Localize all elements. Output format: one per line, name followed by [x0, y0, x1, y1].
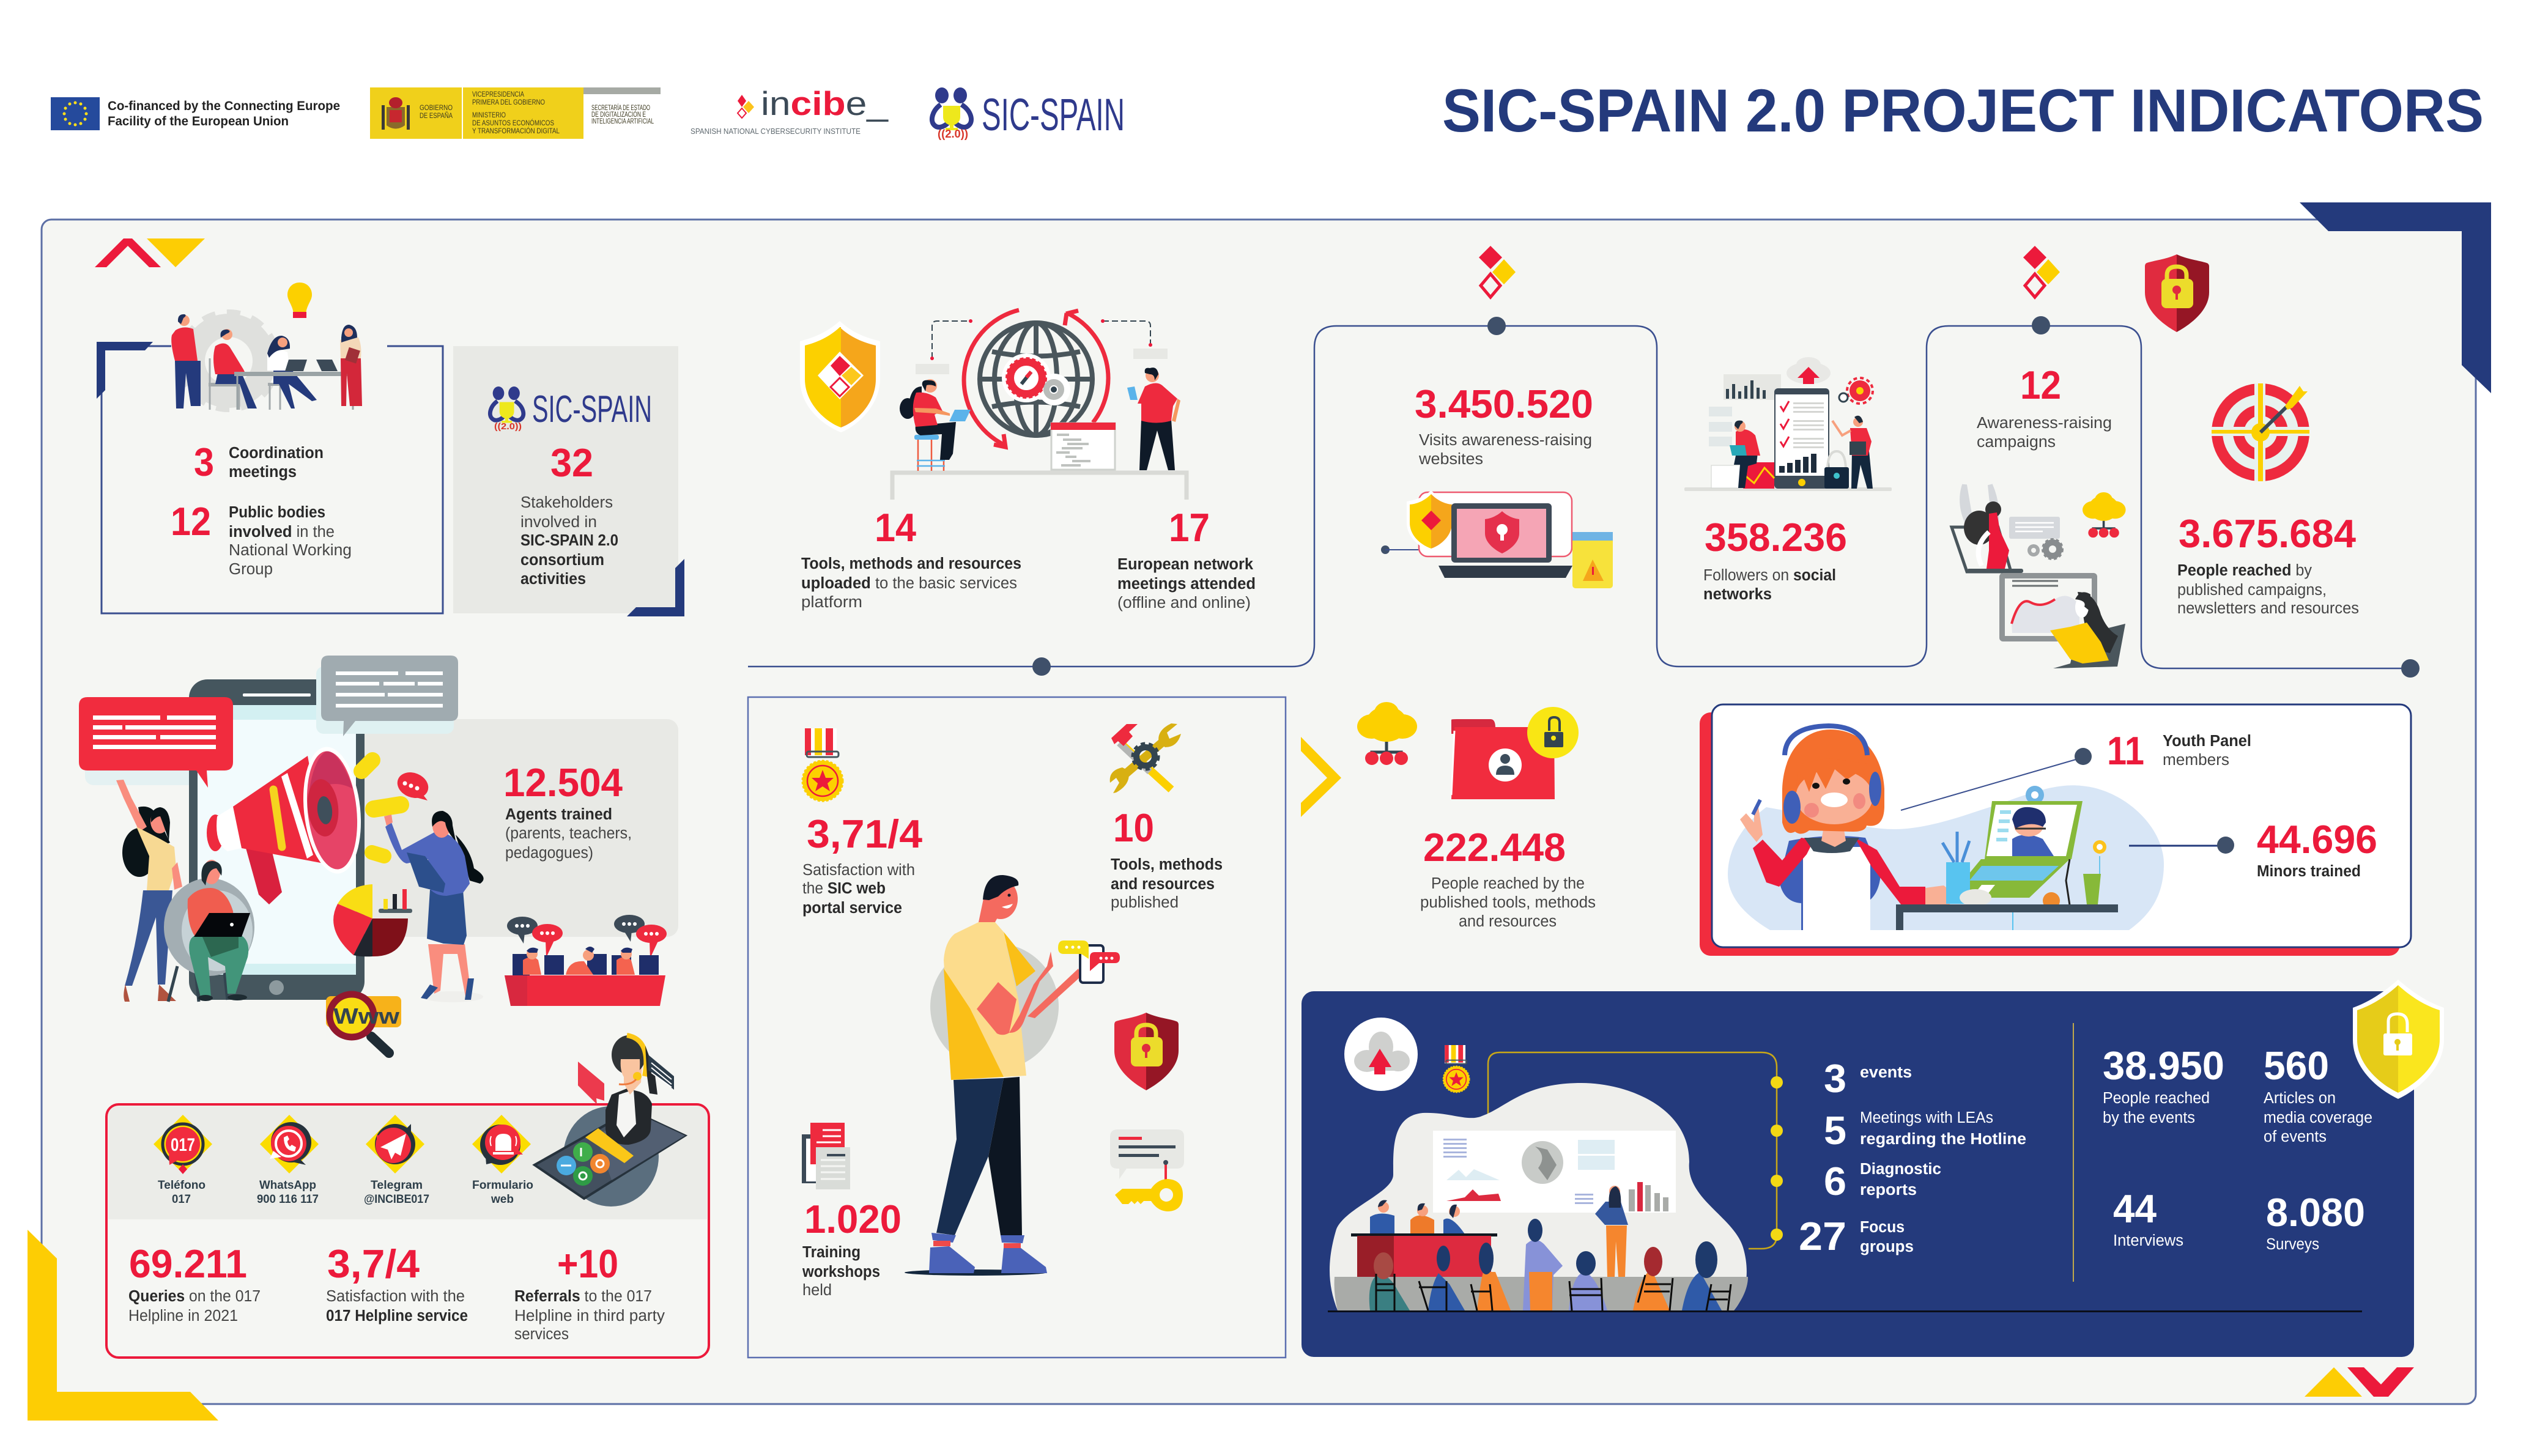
stat: referrals: Referrals to the 017: [514, 1288, 652, 1305]
stat: social followers: Followers on social: [1703, 567, 1836, 584]
stat: diagnostic reports: Diagnostic: [1860, 1161, 1941, 1178]
label: telephone: [158, 1179, 206, 1206]
stat: people reached by tools: 222.448: [1423, 825, 1566, 870]
logo: Connecting Europe Facility: Co-financed by the Connecting Europe: [108, 99, 340, 113]
divider: [2073, 1023, 2074, 1282]
stat: tools published: 10: [1113, 805, 1154, 850]
logo: Gobierno de España: PRIMERA DEL GOBIERNO: [472, 98, 545, 106]
stat: training workshops: held: [802, 1282, 832, 1299]
logo: SIC-SPAIN: [932, 87, 1125, 140]
stat: meetings with LEAs: 5: [1824, 1108, 1846, 1153]
panel: web portal and training: [748, 697, 1286, 1358]
stat: youth panel: [2107, 728, 2251, 773]
logo: SIC-SPAIN: SIC-SPAIN: [982, 89, 1125, 140]
figure: woman with tablet: [384, 811, 484, 1002]
icon: key and message: [1110, 1129, 1184, 1211]
stat: public bodies: National Working: [229, 542, 352, 559]
illustration: laptop with security shield: [1381, 490, 1613, 588]
icon: diamonds above card three: [2023, 246, 2060, 297]
stat: media articles: of events: [2264, 1128, 2327, 1145]
icon: telegram: [366, 1115, 424, 1173]
stat: tools uploaded: platform: [801, 594, 862, 611]
stat: referrals: Helpline in third party: [514, 1307, 665, 1325]
logo: INCIBE: SPANISH NATIONAL CYBERSECURITY INSTITUTE: [691, 127, 861, 136]
illustration: girl at laptop: [1728, 726, 2164, 930]
stat: portal satisfaction: portal service: [802, 900, 902, 917]
panel: 017 helpline: [106, 1035, 709, 1358]
stat: training workshops: 1.020: [804, 1197, 902, 1241]
stat: media articles: Articles on: [2264, 1090, 2336, 1107]
stat: tools published: published: [1111, 894, 1179, 911]
logo: SIC-SPAIN: ((2.0)): [938, 128, 968, 140]
stat: training workshops: [802, 1197, 902, 1299]
stat: tools uploaded: 14: [875, 505, 916, 550]
illustration: call centre desk: [505, 915, 667, 1006]
icon: code window: [1051, 423, 1116, 470]
icon: medal: [802, 728, 843, 801]
stat: awareness campaigns: [1977, 363, 2112, 451]
icon: megaphone: [207, 744, 401, 904]
label: telegram: @INCIBE017: [364, 1193, 429, 1206]
figure: man with tablet: [1127, 368, 1180, 470]
label: whatsapp: [257, 1179, 319, 1206]
stat: coordination meetings: 3: [194, 440, 214, 484]
stat: training workshops: Training: [802, 1244, 861, 1261]
icon: cloud upload: [1344, 1018, 1418, 1091]
logo: Connecting Europe Facility: Facility of the European Union: [108, 114, 289, 128]
stat: youth panel: 11: [2107, 728, 2144, 773]
stat: website visits: 3.450.520: [1415, 382, 1593, 426]
stat: social followers: [1703, 515, 1847, 603]
logo: Gobierno de España: INTELIGENCIA ARTIFICIAL: [591, 117, 654, 125]
stat: social followers: 358.236: [1705, 515, 1847, 560]
stat: diagnostic reports: reports: [1860, 1181, 1917, 1199]
illustration: social media phone: [1684, 357, 1892, 491]
label: telephone: 017: [172, 1193, 191, 1206]
logo: Gobierno de España: DE ASUNTOS ECONÓMICOS: [472, 118, 554, 127]
stat: helpline satisfaction: 017 Helpline service: [326, 1307, 468, 1325]
icon: www magnifier: [326, 994, 401, 1053]
stat: awareness campaigns: 12: [2020, 363, 2061, 407]
stat: focus groups: groups: [1860, 1238, 1914, 1255]
stat: portal satisfaction: 3,71/4: [807, 811, 922, 856]
desk objects: [1896, 832, 2118, 930]
text: stakeholders description: [520, 494, 618, 588]
stat: public bodies: 12: [171, 499, 211, 544]
stat: agents trained: [503, 760, 632, 862]
stat: queries: Helpline in 2021: [128, 1307, 238, 1325]
logo: INCIBE: [691, 84, 889, 136]
stat: queries: 69.211: [129, 1241, 247, 1286]
logo: Gobierno de España: SECRETARÍA DE ESTADO: [591, 103, 650, 112]
logo: SIC-SPAIN small: SIC-SPAIN: [532, 388, 652, 431]
logo: Gobierno de España: DE DIGITALIZACIÓN E: [591, 109, 646, 119]
icon: medal small: [1443, 1045, 1470, 1092]
timeline dots: [1771, 1076, 1783, 1241]
stat: tools published: and resources: [1111, 876, 1215, 893]
figure: man with phone: [905, 875, 1120, 1276]
icon: www magnifier: Www: [333, 1003, 400, 1029]
chart: pie and bars: [333, 884, 412, 956]
laptop with video call: [1949, 786, 2083, 905]
stat: agents trained: 12.504: [503, 760, 623, 805]
panel: agents trained: [79, 656, 2444, 1358]
illustration: phone with megaphone: [79, 656, 484, 1053]
stat: youth panel: members: [2163, 752, 2229, 769]
stat: meetings with LEAs: [1824, 1108, 2026, 1153]
stat: public bodies: involved in the: [229, 523, 335, 541]
stat: training workshops: workshops: [802, 1263, 880, 1280]
stat: helpline satisfaction: [326, 1241, 468, 1325]
panel: coordination: [97, 283, 443, 613]
stat: people reached by campaigns: 3.675.684: [2179, 511, 2356, 556]
stat: network meetings: (offline and online): [1117, 594, 1251, 612]
stat: social followers: networks: [1703, 586, 1772, 603]
stat: people reached by tools: People reached by the: [1431, 875, 1585, 892]
stat: coordination meetings: Coordination: [229, 445, 324, 462]
stat: people reached by campaigns: People reached by: [2177, 562, 2312, 579]
logo: Connecting Europe Facility: [51, 97, 340, 130]
stat: queries: Queries on the 017: [128, 1288, 261, 1305]
decoration: red and yellow arrows bottom right: [2305, 1367, 2414, 1397]
stat: surveys: 8.080: [2266, 1190, 2365, 1235]
icon: phone 017: [154, 1115, 212, 1174]
stat: portal satisfaction: the SIC web: [802, 880, 886, 897]
stat: awareness campaigns: Awareness-raising: [1977, 415, 2112, 432]
stat: interviews: 44: [2113, 1186, 2157, 1231]
stat: youth panel: Youth Panel: [2163, 733, 2251, 750]
presenter woman: [1595, 1186, 1628, 1277]
stat: focus groups: Focus: [1860, 1219, 1905, 1236]
arrow: yellow chevron: [1301, 737, 1341, 817]
stat: network meetings: meetings attended: [1117, 575, 1256, 593]
text: stakeholders description: activities: [520, 571, 586, 588]
panel: stakeholders: 32: [550, 440, 593, 485]
baseline: [1328, 1310, 2362, 1312]
icon: diamonds above card one: [1479, 246, 1516, 297]
illustration: conference room: [1330, 1083, 1748, 1310]
stat: focus groups: [1799, 1214, 1914, 1258]
stat: surveys: Surveys: [2266, 1236, 2319, 1253]
stat: tools uploaded: [801, 505, 1021, 611]
icon: web form alarm: [472, 1115, 531, 1173]
text: stakeholders description: consortium: [520, 552, 604, 569]
panel: stakeholders: [453, 346, 684, 616]
panel: events: [1302, 980, 2444, 1357]
icon: yellow shield with diamonds: [800, 321, 880, 432]
label: telegram: [364, 1179, 429, 1206]
stat: diagnostic reports: [1824, 1159, 1941, 1203]
corner bracket: bottom left: [28, 1230, 218, 1421]
stat: diagnostic reports: 6: [1824, 1159, 1846, 1203]
label: web form: Formulario: [472, 1179, 533, 1192]
label: web form: [472, 1179, 533, 1206]
connector dot: youth panel: [2075, 748, 2092, 765]
audience: [1369, 1219, 1731, 1310]
connector: minors trained: [2129, 837, 2234, 854]
logo: Gobierno de España: Y TRANSFORMACIÓN DIGITAL: [472, 126, 560, 135]
stat: network meetings: [1117, 505, 1256, 612]
girl: [1740, 726, 1957, 930]
stat: agents trained: pedagogues): [505, 844, 593, 862]
stat: tools uploaded: uploaded to the basic services: [801, 575, 1017, 592]
title: SIC-SPAIN 2.0 PROJECT INDICATORS: [1442, 76, 2484, 144]
logo: Gobierno de España: [370, 87, 661, 139]
stat: events: 3: [1824, 1056, 1846, 1101]
logo: SIC-SPAIN small: [490, 386, 652, 432]
illustration: helpline agent on phone: [535, 1035, 685, 1207]
stat: portal satisfaction: Satisfaction with: [802, 862, 915, 879]
stat: people reached by campaigns: newsletters and resources: [2177, 600, 2359, 617]
speech bubble: grey: [321, 656, 458, 736]
stat: helpline satisfaction: 3,7/4: [327, 1241, 420, 1286]
stat: agents trained: Agents trained: [505, 806, 612, 823]
stat: public bodies: [171, 499, 352, 578]
label: telegram: Telegram: [371, 1179, 423, 1192]
stat: network meetings: 17: [1169, 505, 1210, 550]
timeline dots: [1032, 316, 2420, 678]
stat: portal satisfaction: [802, 811, 922, 917]
stat: referrals: [514, 1241, 665, 1343]
main frame panel: [42, 220, 2476, 1404]
stat: public bodies: Group: [229, 561, 273, 578]
speech bubble: red: [79, 697, 233, 788]
icon: documents: [802, 1123, 850, 1189]
stat: public bodies: Public bodies: [229, 504, 325, 521]
icon: whatsapp: [260, 1115, 319, 1173]
stat: tools published: [1111, 805, 1223, 911]
icon: cycle arrows: [964, 310, 1108, 447]
platform: [892, 473, 1187, 500]
label: whatsapp: 900 116 117: [257, 1193, 319, 1206]
stat: website visits: websites: [1418, 451, 1483, 468]
illustration: globe and people: [892, 310, 1187, 500]
timeline connector: [1488, 1052, 1777, 1249]
text: stakeholders description: Stakeholders: [520, 494, 613, 511]
stat: queries: [128, 1241, 261, 1325]
icon: phone 017: 017: [171, 1135, 195, 1155]
stat: interviews: [2113, 1186, 2183, 1249]
logo: SIC-SPAIN small: ((2.0)): [494, 421, 522, 432]
stat: website visits: [1415, 382, 1593, 468]
stat: coordination meetings: meetings: [229, 464, 297, 481]
stat: referrals: +10: [557, 1241, 618, 1286]
stat: interviews: Interviews: [2113, 1232, 2183, 1249]
icon: hammer, wrench and gear: [1110, 723, 1181, 793]
stat: helpline satisfaction: Satisfaction with the: [326, 1288, 465, 1305]
stat: people reached by tools: and resources: [1459, 913, 1557, 930]
stat: meetings with LEAs: Meetings with LEAs: [1860, 1109, 1993, 1126]
icon: red lock shield: [1114, 1013, 1179, 1090]
icon: yellow open lock shield: [2353, 980, 2444, 1099]
corner bracket: top right: [2300, 202, 2491, 393]
stat: people reached by campaigns: [2177, 511, 2359, 617]
text: stakeholders description: SIC-SPAIN 2.0: [520, 532, 618, 549]
stat: tools uploaded: Tools, methods and resources: [801, 555, 1021, 572]
stat: focus groups: 27: [1799, 1214, 1846, 1258]
stat: minors trained: 44.696: [2257, 817, 2377, 862]
illustration: team at table: [171, 283, 362, 410]
icon: link gears: [1002, 353, 1070, 405]
icon: target with dart: [2212, 383, 2309, 481]
stat: people reached by events: by the events: [2103, 1109, 2195, 1126]
panel: youth panel card: [1700, 704, 2411, 956]
stat: people reached by tools: [1420, 825, 1596, 930]
logo: Gobierno de España: MINISTERIO: [472, 111, 506, 119]
stat: people reached by events: 38.950: [2103, 1043, 2224, 1088]
stat: network meetings: European network: [1117, 556, 1254, 573]
text: stakeholders description: involved in: [520, 514, 597, 531]
connector line around the top cards: [748, 326, 2410, 668]
stat: people reached by tools: published tools, methods: [1420, 894, 1596, 911]
stat: people reached by campaigns: published campaigns,: [2177, 582, 2327, 599]
stat: media articles: media coverage: [2264, 1109, 2372, 1126]
stat: people reached by events: People reached: [2103, 1090, 2210, 1107]
stat: events: [1824, 1056, 1912, 1101]
label: whatsapp: WhatsApp: [259, 1179, 316, 1192]
icon: small chat bubble: [393, 768, 432, 802]
stat: events: events: [1860, 1064, 1912, 1081]
icon: red lock shield top: [2145, 254, 2209, 332]
logo: INCIBE: incibe_: [761, 84, 889, 122]
label: telephone: Teléfono: [158, 1179, 206, 1192]
figure: woman waving: [116, 780, 182, 1002]
panel speakers at desk: [1351, 1200, 1497, 1277]
decoration: red and yellow arrows top left: [95, 238, 205, 267]
stat: meetings with LEAs: regarding the Hotline: [1860, 1131, 2026, 1148]
figure: man on egg chair: [164, 860, 254, 1002]
stat: agents trained: (parents, teachers,: [505, 825, 632, 842]
icon: red folder with lock: [1451, 707, 1579, 799]
logo: Gobierno de España: VICEPRESIDENCIA: [472, 90, 524, 98]
stat: media articles: [2264, 1043, 2372, 1145]
stat: tools published: Tools, methods: [1111, 856, 1223, 873]
icon: globe: [980, 323, 1092, 435]
stat: minors trained: Minors trained: [2257, 863, 2361, 880]
stat: media articles: 560: [2264, 1043, 2329, 1088]
stat: awareness campaigns: campaigns: [1977, 434, 2056, 451]
figure: woman with laptop: [900, 379, 971, 471]
logo: Gobierno de España: DE ESPAÑA: [420, 111, 453, 120]
icon: cloud network: [1357, 702, 1417, 765]
logo: Gobierno de España: GOBIERNO: [420, 103, 453, 112]
illustration: awareness campaign people: [1952, 485, 2126, 668]
stat: website visits: Visits awareness-raising: [1419, 432, 1592, 449]
stat: people reached by events: [2103, 1043, 2224, 1126]
label: web form: web: [491, 1193, 514, 1206]
stat: coordination meetings: [194, 440, 324, 484]
stat: referrals: services: [514, 1326, 569, 1343]
